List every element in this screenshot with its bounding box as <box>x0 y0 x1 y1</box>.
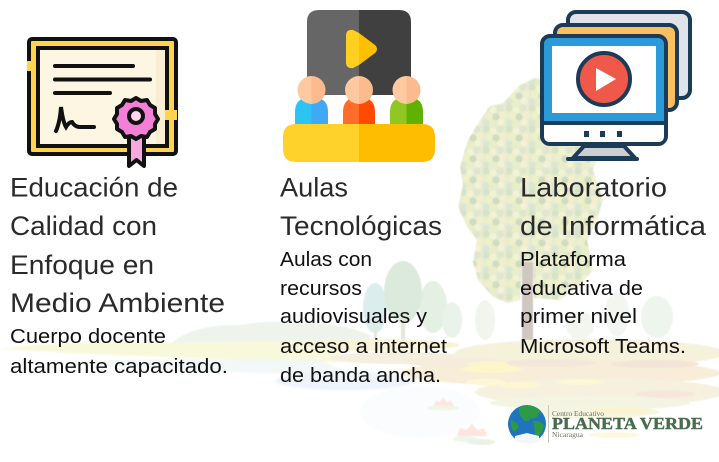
body: plataforma: primer nivel <box>520 306 637 328</box>
logo text: Centro Educativo <box>552 410 605 418</box>
large tree <box>458 78 603 340</box>
body: aulas: acceso a internet <box>280 336 447 358</box>
body: cuerpo docente <box>10 326 228 378</box>
icon: globe <box>508 405 546 444</box>
heading: aulas: Aulas <box>280 172 348 202</box>
table <box>283 124 359 162</box>
body: cuerpo docente: altamente capacitado. <box>10 356 228 378</box>
heading: aulas <box>280 172 442 241</box>
background: lake landscape <box>0 78 719 445</box>
heading: educación: Educación de <box>10 172 178 202</box>
column 3 text <box>520 172 707 358</box>
heading: educación: Calidad con <box>10 211 157 241</box>
play button <box>346 30 359 68</box>
column 2 text <box>280 172 447 387</box>
icon: computer monitor with stacked windows <box>542 12 690 159</box>
person right <box>390 98 406 126</box>
body: cuerpo docente: Cuerpo docente <box>10 326 166 348</box>
person left <box>295 98 312 126</box>
body: aulas: Aulas con <box>280 249 372 271</box>
body: plataforma: Plataforma <box>520 249 627 271</box>
logo: Planeta Verde: Nicaragua <box>552 431 584 439</box>
body: aulas <box>280 249 447 387</box>
shoreline bands <box>0 340 480 438</box>
icon: certificate <box>27 39 177 166</box>
heading: educación <box>10 172 225 318</box>
heading: laboratorio <box>520 172 707 241</box>
ribbon <box>129 130 144 166</box>
heading: educación: Medio Ambiente <box>10 288 225 318</box>
body: aulas: recursos <box>280 278 362 300</box>
pond reflections <box>300 339 719 438</box>
heading: aulas: Tecnológicas <box>280 211 442 241</box>
heading: laboratorio: Laboratorio <box>520 172 667 202</box>
seal <box>114 98 158 139</box>
background trees <box>170 261 673 350</box>
body: plataforma: Microsoft Teams. <box>520 336 686 358</box>
body: aulas: audiovisuales y <box>280 306 427 328</box>
body: aulas: de banda ancha. <box>280 365 441 387</box>
person middle <box>343 98 359 126</box>
body: plataforma <box>520 249 686 358</box>
lotus flowers <box>427 398 495 445</box>
text lines <box>55 66 150 131</box>
heading: laboratorio: de Informática <box>520 211 707 241</box>
frame notches <box>27 61 31 71</box>
body: plataforma: educativa de <box>520 278 643 300</box>
logo: Planeta Verde: PLANETA VERDE <box>552 414 703 433</box>
logo: Planeta Verde <box>508 405 703 444</box>
column 1 text <box>10 172 228 378</box>
icon: classroom video <box>283 10 435 162</box>
heading: educación: Enfoque en <box>10 250 154 280</box>
